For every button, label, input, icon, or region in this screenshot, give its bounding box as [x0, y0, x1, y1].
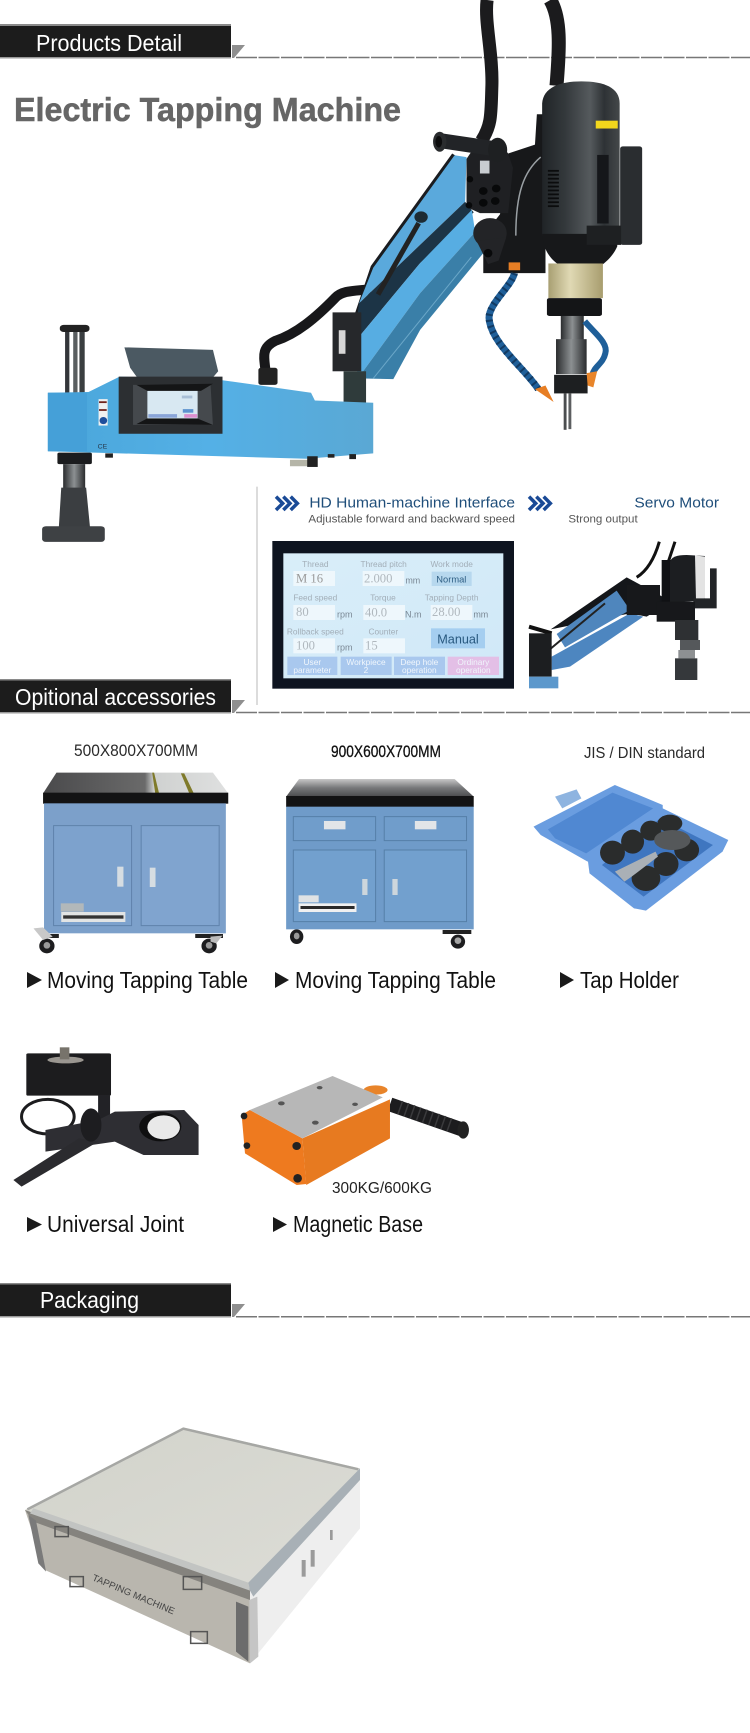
- left power hose: [481, 0, 492, 141]
- icon: chevrons: [276, 497, 297, 510]
- side steel band: [248, 1468, 360, 1597]
- rear post: [60, 325, 89, 393]
- universal joint: [13, 1047, 199, 1187]
- touch screen: M 16: [296, 572, 323, 586]
- touch screen: Torque: [370, 593, 396, 603]
- caption: Universal Joint: Universal Joint: [47, 1211, 185, 1237]
- section header: Packaging: Packaging: [40, 1287, 139, 1313]
- handle: [433, 132, 507, 162]
- touch screen: Manual: [437, 632, 479, 646]
- touch screen: operation: [456, 665, 491, 675]
- magnetic base: [241, 1076, 469, 1185]
- touch screen: mm: [405, 575, 420, 585]
- touch screen: operation: [402, 665, 437, 675]
- bottom buttons: [287, 657, 337, 675]
- left coolant hose: [489, 262, 554, 402]
- touch screen: 80: [296, 605, 309, 619]
- section header: Packaging: [0, 1283, 750, 1318]
- touch screen: 15: [365, 638, 378, 652]
- title: Electric Tapping Machine: [14, 91, 401, 128]
- crate marking: TAPPING MACHINE: [91, 1573, 176, 1616]
- touch screen: Thread pitch: [361, 559, 407, 569]
- column: [344, 371, 366, 403]
- touch screen: rpm: [337, 609, 352, 619]
- touch screen: Feed speed: [293, 593, 338, 603]
- touch screen: User: [304, 657, 321, 667]
- touch screen: 2.000: [364, 572, 392, 586]
- under-base fittings: [105, 453, 356, 467]
- crate front: [25, 1510, 250, 1663]
- cable from base to arm: [264, 289, 371, 371]
- black collar: [547, 298, 602, 316]
- standard label: JIS / DIN standard: [584, 745, 705, 762]
- touch screen: 100: [296, 638, 315, 652]
- section header: Products Detail: Products Detail: [36, 30, 182, 56]
- warning label: [596, 121, 618, 129]
- tap holder case: [534, 785, 728, 911]
- section header: Opitional accessories: Opitional accessories: [15, 684, 216, 710]
- touch screen: 2: [364, 665, 369, 675]
- heading: HD interface: HD Human-machine Interface: [309, 494, 515, 511]
- accessory drawings row 2: [13, 1047, 469, 1187]
- motor body: [542, 81, 620, 265]
- heading: servo motor: Servo Motor: [634, 494, 719, 511]
- mode button: [432, 572, 472, 586]
- icon: chevrons: [529, 497, 550, 510]
- touch screen: mm: [473, 609, 488, 619]
- touch screen: Workpiece: [346, 657, 386, 667]
- touch screen: N.m: [405, 609, 421, 619]
- table 900x600x700: [286, 779, 474, 949]
- tube bracket: [587, 226, 621, 245]
- caption: Tap Holder: Tap Holder: [580, 967, 679, 993]
- front steel band: [25, 1510, 250, 1600]
- blue base: [48, 377, 373, 459]
- caption: Moving Tapping Table 2: Moving Tapping Table: [295, 967, 496, 993]
- touch screen: Rollback speed: [287, 626, 344, 636]
- right power hose: [550, 0, 559, 86]
- machine illustration: [42, 0, 642, 542]
- cable gland: [258, 368, 278, 385]
- subheading: speed: Adjustable forward and backward speed: [308, 513, 515, 525]
- brass ring: [548, 263, 603, 298]
- display panel: [119, 377, 223, 434]
- vertical divider: [256, 487, 258, 705]
- accessory drawings row 1: [33, 773, 728, 953]
- manual button: [431, 628, 485, 648]
- control box lid: [124, 347, 218, 380]
- touch screen: [272, 541, 514, 689]
- cam plate: [473, 218, 507, 264]
- sensor block: [333, 312, 361, 371]
- packing crate: [25, 1427, 360, 1663]
- touch screen: Work mode: [430, 559, 473, 569]
- side tube: [620, 146, 642, 245]
- touch screen: Ordinary: [457, 657, 490, 667]
- panel: interface and servo motor: [256, 487, 719, 705]
- front corner plates: [28, 1515, 258, 1663]
- crate side: [250, 1468, 360, 1663]
- lower foot: [42, 453, 105, 542]
- touch screen: rpm: [337, 642, 352, 652]
- section header: Products Detail: [0, 24, 750, 58]
- touch screen: Counter: [369, 626, 398, 636]
- table 500x800x700: [33, 773, 228, 953]
- caption: Magnetic Base: Magnetic Base: [293, 1211, 423, 1237]
- touch screen: Normal: [436, 574, 466, 584]
- thin air line: [516, 157, 541, 236]
- touch screen: 40.0: [365, 606, 387, 620]
- right coolant hose: [585, 321, 606, 387]
- section header: Opitional accessories: [0, 679, 750, 714]
- weight label: 300KG/600KG: [332, 1180, 432, 1197]
- caption: Moving Tapping Table 1: Moving Tapping Table: [47, 967, 248, 993]
- touch screen: Thread: [302, 559, 329, 569]
- latches: [55, 1527, 207, 1643]
- touch screen: Tapping Depth: [425, 593, 479, 603]
- vent slots: [548, 170, 559, 207]
- subheading: strong output: Strong output: [568, 513, 639, 525]
- motor mount plate: [483, 114, 545, 273]
- crate top: [25, 1427, 360, 1591]
- touch screen: parameter: [293, 665, 332, 675]
- arm: [347, 154, 483, 379]
- photo: servo motor machine: [529, 542, 717, 688]
- size label: 500X800X700MM: 500X800X700MM: [74, 742, 198, 760]
- size label: 900X600X700MM: 900X600X700MM: [331, 743, 441, 761]
- touch screen: Deep hole: [400, 657, 439, 667]
- black arm plate with bolts: [466, 140, 513, 213]
- side markings: [302, 1530, 333, 1577]
- spindle and chuck: [554, 316, 588, 430]
- top rim: [27, 1429, 358, 1509]
- CE mark: CE: [98, 442, 107, 450]
- touch screen: 28.00: [432, 605, 460, 619]
- switch labels: [99, 399, 108, 426]
